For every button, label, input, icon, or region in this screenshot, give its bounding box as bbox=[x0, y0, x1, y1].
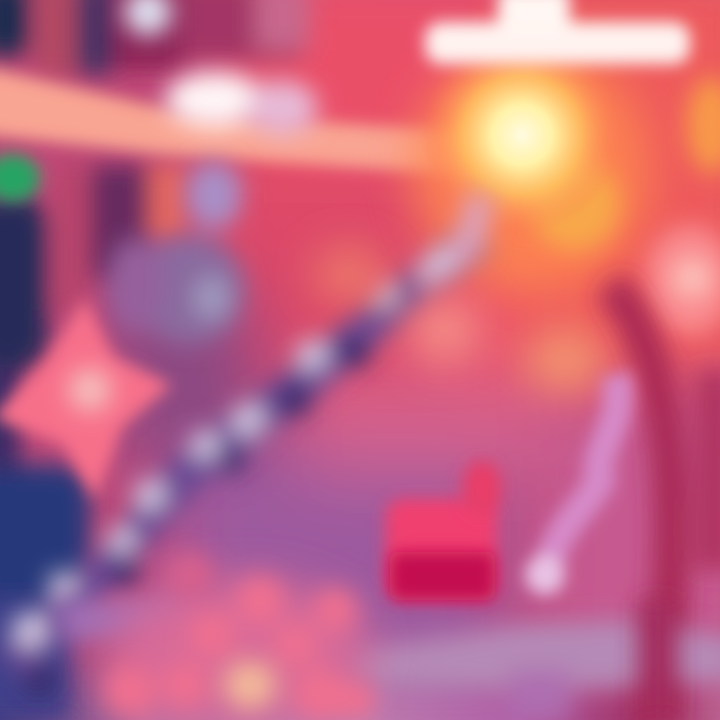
diagonal chain bbox=[10, 195, 482, 696]
right squiggle bbox=[525, 375, 618, 595]
dark red stem bbox=[610, 285, 720, 720]
purple figure bbox=[107, 161, 245, 345]
white cloud bbox=[124, 0, 318, 136]
orange-pink glints bbox=[316, 249, 605, 390]
glowing sun bbox=[410, 35, 720, 295]
pink horizontal band bbox=[0, 66, 470, 175]
green spot bbox=[0, 154, 40, 202]
lower lavender platform bbox=[60, 600, 720, 720]
pink star bbox=[0, 298, 172, 500]
right pink star bbox=[645, 225, 720, 335]
left dark column bbox=[0, 160, 186, 720]
top-left dark panels bbox=[0, 0, 310, 75]
red gift block bbox=[385, 460, 502, 600]
white top bar bbox=[425, 0, 690, 64]
dark stem over platform bbox=[638, 600, 678, 720]
bottom pink star cluster bbox=[104, 551, 375, 720]
